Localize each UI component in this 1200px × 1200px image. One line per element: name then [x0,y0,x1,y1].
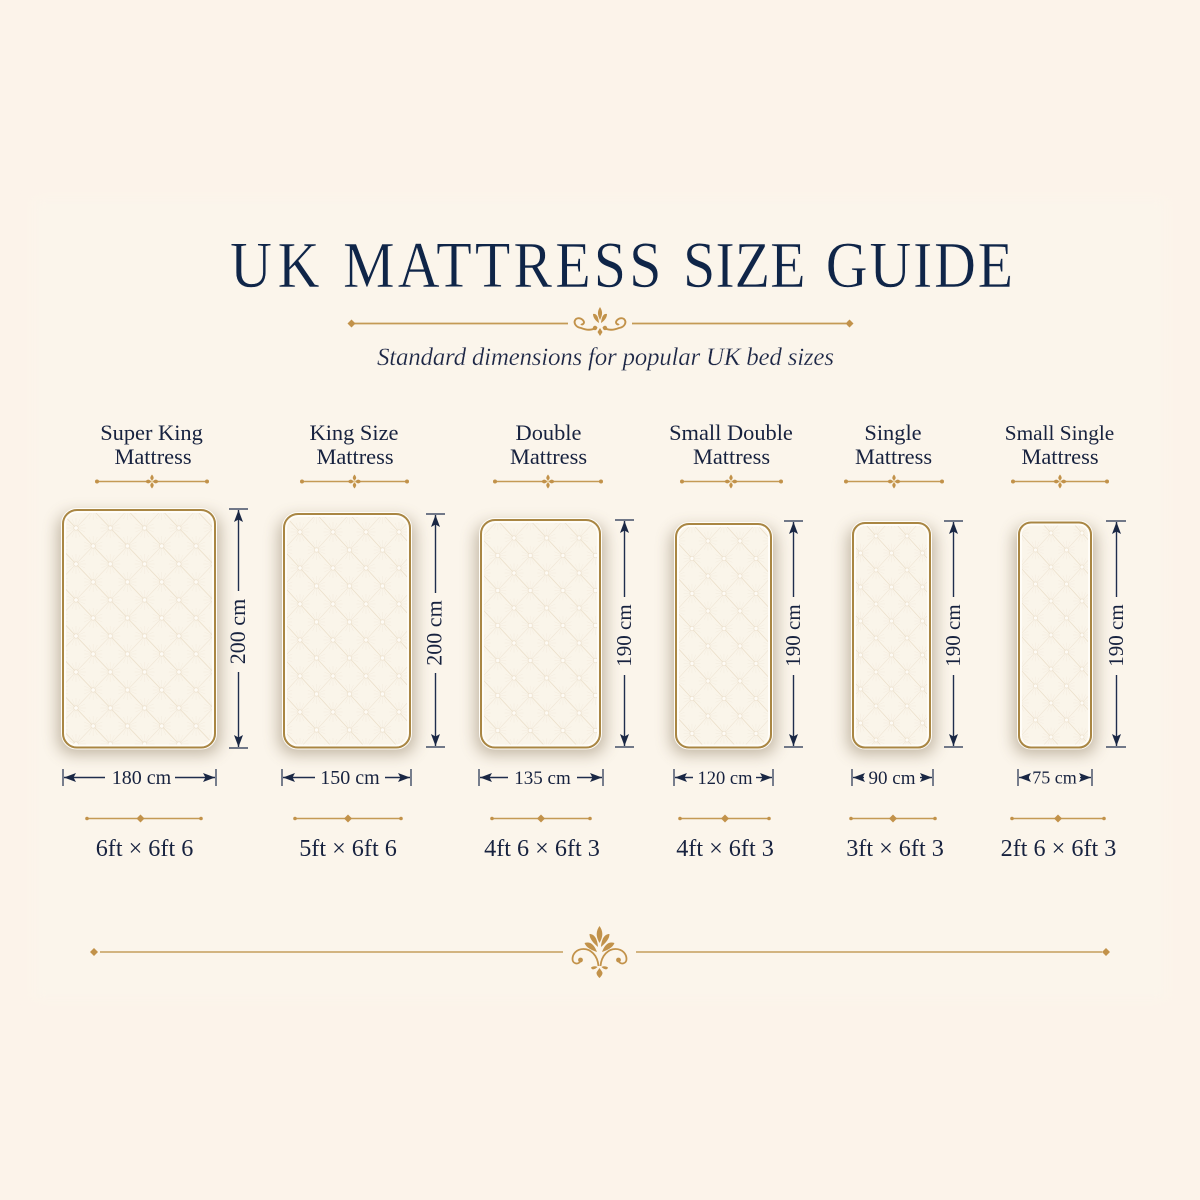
imperial size: super king: 6ft × 6ft 6 [96,835,193,862]
title: MATTRESS [343,230,665,302]
panel: king size [279,420,446,862]
heading: double: Double [516,420,582,445]
ornament: super king imperial [85,814,203,822]
width dimension: 90 cm [852,768,933,789]
imperial size: king size: 5ft × 6ft 6 [299,835,397,862]
imperial size: small single: 2ft 6 × 6ft 3 [1001,835,1116,862]
imperial size: single: 3ft × 6ft 3 [846,835,944,862]
panel: small double [669,420,805,862]
inner background panel [33,198,1167,1000]
title divider ornament [348,307,854,336]
heading: double: Mattress [510,444,587,469]
panel: single [844,420,965,862]
subtitle: Standard dimensions for popular UK bed sizes [377,344,834,371]
width dimension: 135 cm [479,768,603,789]
ornament: small single imperial [1010,814,1106,822]
ornament: double heading [493,474,603,488]
heading: small double: Small Double [669,420,793,445]
heading: single: Single [864,420,922,445]
ornament: small single heading [1011,474,1109,488]
heading: small single: Mattress [1021,444,1099,469]
imperial size: small double: 4ft × 6ft 3 [676,835,774,862]
ornament: small double imperial [678,814,771,822]
heading: single: Mattress [855,444,932,469]
height dimension: 190 cm: 190 cm [941,604,965,667]
title: GUIDE [826,230,1015,302]
heading: small double: Mattress [693,444,770,469]
height dimension: 190 cm: 190 cm [612,604,636,667]
width dimension: 150 cm: 150 cm [320,767,380,789]
heading: king size: Mattress [316,444,394,469]
title: UK [230,230,325,302]
panel: small single [1001,421,1128,862]
heading: super king: Super King [100,420,203,445]
mattress: single [848,522,935,754]
ornament: king size imperial [293,814,403,822]
width dimension: 90 cm: 90 cm [869,768,916,789]
ornament: super king heading [95,474,209,488]
heading: small single: Small Single [1005,421,1114,445]
ornament: king size heading [300,474,409,488]
width dimension: 135 cm: 135 cm [514,768,571,789]
ornament: single heading [844,474,944,488]
width dimension: 120 cm: 120 cm [698,769,753,789]
height dimension: 200 cm: 200 cm [422,600,446,666]
height dimension: 190 cm: 190 cm [781,604,805,667]
width dimension: 180 cm: 180 cm [112,767,172,789]
width dimension: 75 cm [1018,768,1092,788]
ornament: single imperial [849,814,937,822]
panel: double [476,420,636,862]
width dimension: 75 cm: 75 cm [1032,768,1077,788]
ornament: double imperial [490,814,592,822]
height dimension: 200 cm: 200 cm [225,599,250,664]
mattress: double [476,518,605,754]
mattress: king size [279,512,415,754]
panel: super king [58,420,250,862]
mattress: small single [1014,521,1096,754]
imperial size: double: 4ft 6 × 6ft 3 [484,835,600,862]
footer divider ornament [90,926,1110,978]
width dimension: 150 cm [282,767,411,789]
mattress: super king [58,508,220,754]
width dimension: 120 cm [674,769,773,789]
title: SIZE [683,230,806,302]
height dimension: 190 cm: 190 cm [1104,604,1128,667]
heading: super king: Mattress [114,444,192,469]
mattress: small double [671,522,776,754]
heading: king size: King Size [310,420,399,445]
ornament: small double heading [680,474,783,488]
